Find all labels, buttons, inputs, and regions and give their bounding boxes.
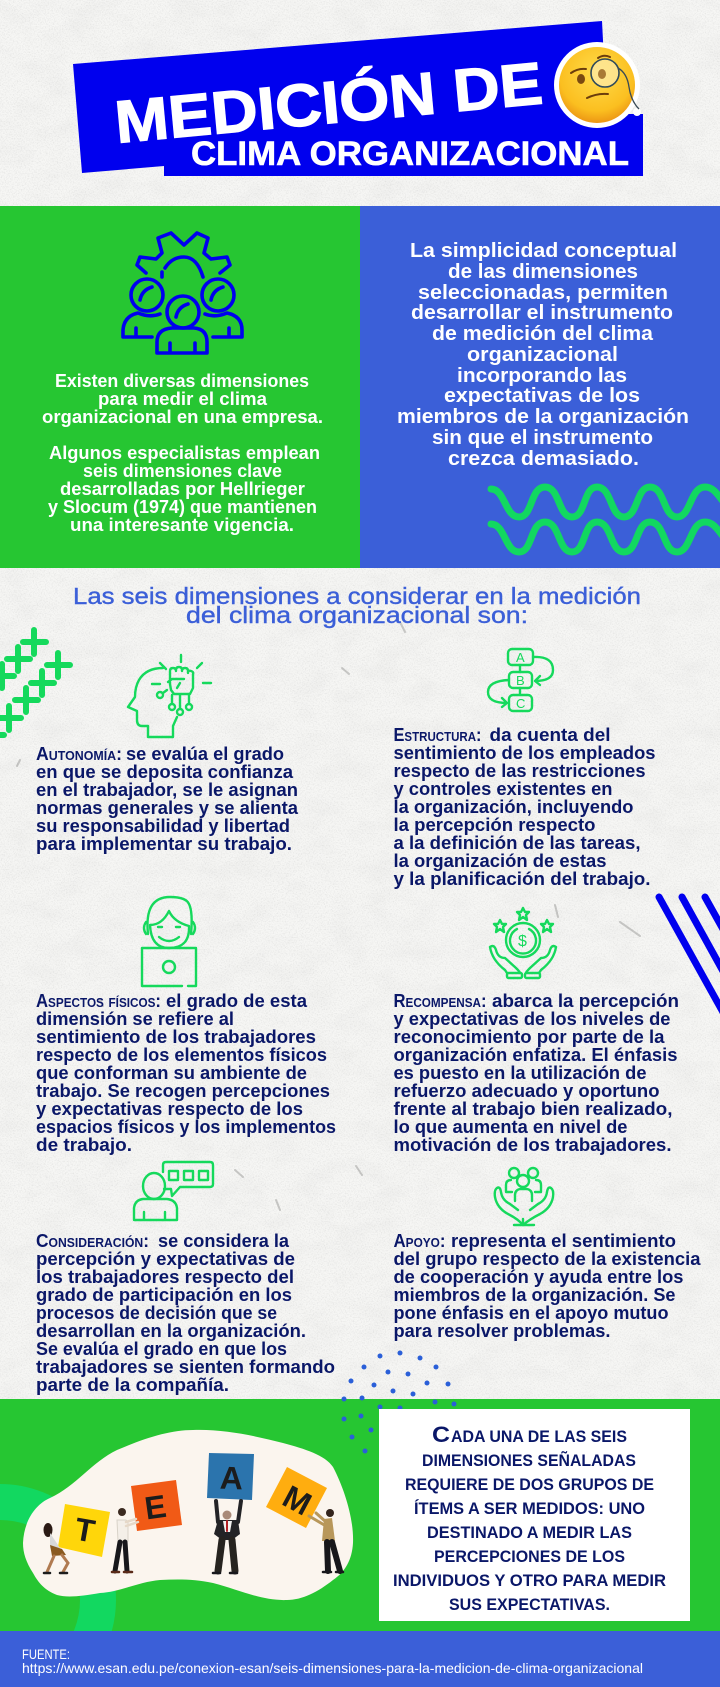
section heading xyxy=(73,583,641,628)
dimension: estructura: respecto de las restricciones xyxy=(394,760,646,781)
letter M xyxy=(266,1467,327,1528)
dimension: estructura xyxy=(394,724,656,889)
callout text: PERCEPCIONES DE LOS xyxy=(434,1547,625,1566)
text block: statement: expectativas de los xyxy=(444,385,640,407)
decorative dots xyxy=(342,1350,456,1454)
dimension: consideración: grado de participación en los xyxy=(36,1284,292,1305)
letter E: E xyxy=(142,1488,169,1526)
icon: person with checklist bubble xyxy=(134,1162,213,1220)
dimension: aspectos físicos: de trabajo. xyxy=(36,1134,132,1155)
dimension: consideración: desarrollan en la organización. xyxy=(36,1320,306,1341)
dimension: estructura: y controles existentes en xyxy=(394,778,612,799)
icon: abc flow: B xyxy=(516,673,525,688)
dimension: estructura: y la planificación del trabajo. xyxy=(394,868,650,889)
panel: right blue statement xyxy=(360,206,720,568)
source label: FUENTE: xyxy=(22,1646,70,1662)
letter M: M xyxy=(277,1478,317,1522)
text block: intro: desarrolladas por Hellrieger xyxy=(60,479,305,499)
blob xyxy=(23,1430,353,1600)
dimension: estructura: la organización de estas xyxy=(394,850,606,871)
dimension: recompensa: motivación de los trabajadores. xyxy=(394,1134,672,1155)
source url: https://www.esan.edu.pe/conexion-esan/seis-dimensiones-para-la-medicion-de-clima-organizacional xyxy=(22,1660,643,1676)
letter A xyxy=(207,1453,254,1500)
text block: intro: organizacional en una empresa. xyxy=(42,407,323,427)
dimension: apoyo: para resolver problemas. xyxy=(394,1320,610,1341)
text block: statement: de las dimensiones xyxy=(448,261,638,283)
dimension: apoyo: Apoyo: xyxy=(394,1230,446,1251)
dimension: recompensa: refuerzo adecuado y oportuno xyxy=(394,1080,660,1101)
dimension: autonomía: en el trabajador, se le asignan xyxy=(36,779,298,800)
text block: intro xyxy=(42,371,323,535)
callout text: REQUIERE DE DOS GRUPOS DE xyxy=(405,1475,654,1494)
dimension: autonomía: en que se deposita confianza xyxy=(36,761,294,782)
dimension: apoyo: representa el sentimiento xyxy=(451,1230,676,1251)
dimension: recompensa: Recompensa: xyxy=(394,990,486,1011)
callout text xyxy=(393,1422,666,1614)
text block: intro: para medir el clima xyxy=(98,389,268,409)
text block: intro: seis dimensiones clave xyxy=(83,461,282,481)
text block: intro: una interesante vigencia. xyxy=(70,515,294,535)
text block: intro: Algunos especialistas emplean xyxy=(49,443,320,463)
text block: statement: La simplicidad conceptual xyxy=(410,240,677,262)
dimension: estructura: sentimiento de los empleados xyxy=(394,742,656,763)
dimension: estructura: Estructura: xyxy=(394,724,482,745)
text block: intro: Existen diversas dimensiones xyxy=(55,371,309,391)
icon: abc flow: A xyxy=(516,650,525,665)
icon: head with fist xyxy=(128,655,211,737)
figure: man with M xyxy=(309,1509,343,1572)
icon: gear and team xyxy=(123,233,242,353)
dimension: consideración: Consideración: xyxy=(36,1230,149,1251)
callout: white box xyxy=(379,1409,690,1621)
dimension: consideración: procesos de decisión que se xyxy=(36,1302,277,1323)
dimension: recompensa: y expectativas de los niveles de xyxy=(394,1008,670,1029)
dimension: consideración: Se evalúa el grado en que los xyxy=(36,1338,287,1359)
dimension: estructura: a la definición de las tareas, xyxy=(394,832,640,853)
figure: man with E xyxy=(112,1508,138,1572)
text block: statement: miembros de la organización xyxy=(397,406,689,428)
panel: footer source xyxy=(0,1631,720,1687)
dimension: consideración xyxy=(36,1230,335,1395)
dimension: aspectos físicos: dimensión se refiere al xyxy=(36,1008,234,1029)
section heading: del clima organizacional son: xyxy=(186,602,528,628)
callout text: DESTINADO A MEDIR LAS xyxy=(427,1523,632,1542)
dimension: aspectos físicos: Aspectos físicos: xyxy=(36,990,161,1011)
dimension: estructura: la organización, incluyendo xyxy=(394,796,634,817)
text block: statement: seleccionadas, permiten xyxy=(418,282,668,304)
dimension: estructura: la percepción respecto xyxy=(394,814,596,835)
callout text: C xyxy=(432,1422,450,1447)
text block: statement: de medición del clima xyxy=(432,323,654,345)
dimension: apoyo xyxy=(394,1230,701,1341)
title banner xyxy=(73,21,643,176)
callout text: ADA UNA DE LAS SEIS xyxy=(451,1427,627,1446)
dimension: aspectos físicos: y expectativas respecto de los xyxy=(36,1098,303,1119)
dimension: recompensa: reconocimiento por parte de la xyxy=(394,1026,665,1047)
dimension: autonomía: su responsabilidad y libertad xyxy=(36,815,290,836)
dimension: recompensa: es puesto en la utilización de xyxy=(394,1062,646,1083)
icon: money in hands: $ xyxy=(518,933,527,950)
dimension: estructura: da cuenta del xyxy=(490,724,610,745)
dimension: autonomía: se evalúa el grado xyxy=(126,743,284,764)
callout text: ÍTEMS A SER MEDIDOS: UNO xyxy=(414,1499,645,1518)
dimension: consideración: se considera la xyxy=(158,1230,290,1251)
decorative blue stripes xyxy=(659,897,720,1014)
dimension: aspectos físicos: trabajo. Se recogen percepciones xyxy=(36,1080,330,1101)
text block: statement: crezca demasiado. xyxy=(448,448,639,470)
icon: abc flow xyxy=(488,649,553,711)
text block: statement: desarrollar el instrumento xyxy=(411,302,673,324)
dimension: apoyo: del grupo respecto de la existencia xyxy=(394,1248,701,1269)
text block: statement: incorporando las xyxy=(457,365,627,387)
dimension: aspectos físicos: respecto de los elementos físicos xyxy=(36,1044,327,1065)
letter A: A xyxy=(219,1460,244,1496)
dimension: recompensa: organización enfatiza. El énfasis xyxy=(394,1044,678,1065)
letter E xyxy=(131,1480,182,1531)
title line one: MEDICIÓN DE xyxy=(112,50,545,156)
icon: group in hands xyxy=(495,1168,553,1225)
text block: intro: y Slocum (1974) que mantienen xyxy=(48,497,317,517)
dimension: apoyo: de cooperación y ayuda entre los xyxy=(394,1266,684,1287)
icon: abc flow: C xyxy=(516,696,525,711)
dimension: autonomía xyxy=(36,743,299,854)
decorative ring xyxy=(0,1502,98,1687)
icon: monocle emoji xyxy=(554,42,641,128)
dimension: apoyo: pone énfasis en el apoyo mutuo xyxy=(394,1302,668,1323)
dimension: apoyo: miembros de la organización. Se xyxy=(394,1284,676,1305)
illustration: team letters xyxy=(23,1430,353,1600)
callout text: DIMENSIONES SEÑALADAS xyxy=(422,1450,636,1470)
section heading: Las seis dimensiones a considerar en la medición xyxy=(73,583,641,609)
dimension: aspectos físicos xyxy=(36,990,336,1155)
panel: bottom green xyxy=(0,1399,720,1631)
dimension: aspectos físicos: el grado de esta xyxy=(166,990,308,1011)
figure: man with A xyxy=(213,1501,241,1573)
dimension: autonomía: Autonomía: xyxy=(36,743,122,764)
icon: person with laptop xyxy=(142,897,196,986)
decorative plus pattern xyxy=(0,630,70,735)
title line two: CLIMA ORGANIZACIONAL xyxy=(191,135,629,173)
dimension: recompensa: frente al trabajo bien realizado, xyxy=(394,1098,672,1119)
panel: left green intro xyxy=(0,206,360,568)
text block: statement xyxy=(397,240,689,470)
dimension: aspectos físicos: sentimiento de los trabajadores xyxy=(36,1026,316,1047)
dimension: consideración: los trabajadores respecto del xyxy=(36,1266,294,1287)
callout text: SUS EXPECTATIVAS. xyxy=(449,1595,610,1614)
dimension: consideración: trabajadores se sienten formando xyxy=(36,1356,335,1377)
dimension: recompensa xyxy=(394,990,679,1155)
dimension: consideración: parte de la compañía. xyxy=(36,1374,229,1395)
callout text: INDIVIDUOS Y OTRO PARA MEDIR xyxy=(393,1571,666,1590)
icon: money in hands xyxy=(490,908,556,978)
dimension: recompensa: abarca la percepción xyxy=(492,990,679,1011)
dimension: autonomía: para implementar su trabajo. xyxy=(36,833,292,854)
figure: woman xyxy=(44,1523,68,1573)
decorative waves xyxy=(491,487,720,552)
text block: statement: organizacional xyxy=(467,344,618,366)
dimension: consideración: percepción y expectativas de xyxy=(36,1248,295,1269)
text block: statement: sin que el instrumento xyxy=(432,427,653,449)
letter T: T xyxy=(72,1511,98,1550)
banner shape xyxy=(73,21,643,176)
dimension: aspectos físicos: que conforman su ambiente de xyxy=(36,1062,307,1083)
dimension: autonomía: normas generales y se alienta xyxy=(36,797,299,818)
dimension: recompensa: lo que aumenta en nivel de xyxy=(394,1116,628,1137)
dimension: aspectos físicos: espacios físicos y los implementos xyxy=(36,1116,336,1137)
letter T xyxy=(58,1504,110,1557)
